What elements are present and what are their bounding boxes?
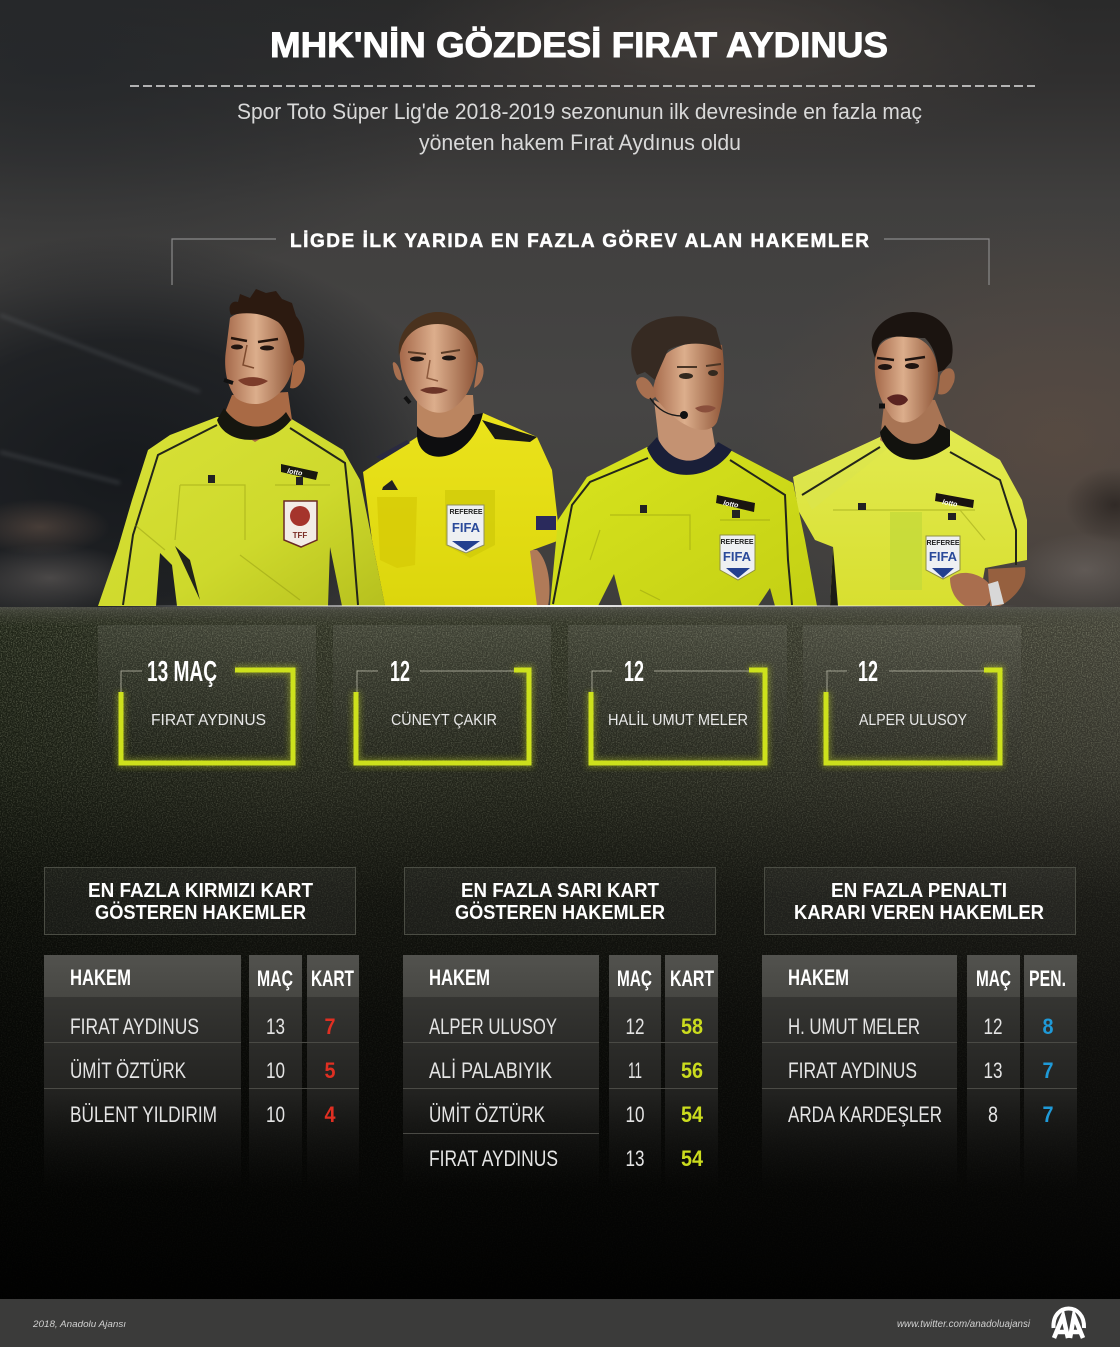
table: yellow cards: FIRAT AYDINUS (429, 1146, 558, 1171)
table: penalties: 8 (1042, 1014, 1054, 1039)
table: yellow cards: 54 (681, 1102, 704, 1127)
illustration: referee Fırat Aydınus: TFF (293, 531, 307, 540)
stat card: Cüneyt Çakır: 12 (390, 656, 410, 688)
stat card: Alper Ulusoy (803, 625, 1021, 785)
table: penalties (762, 955, 1077, 1190)
baseline light under referees (98, 605, 1018, 607)
table: red cards: FIRAT AYDINUS (70, 1014, 199, 1039)
illustration: referee Cüneyt Çakır: FIFA (452, 520, 481, 535)
table: yellow cards: KART (670, 966, 714, 991)
heading: penalties (764, 868, 1076, 934)
table: red cards: 7 (324, 1014, 336, 1039)
stat card: Alper Ulusoy: ALPER ULUSOY (859, 712, 967, 729)
table: penalties: 13 (984, 1058, 1002, 1083)
table: yellow cards: HAKEM (429, 965, 490, 990)
table: yellow cards: 56 (681, 1058, 703, 1083)
stat card: Cüneyt Çakır (333, 625, 551, 785)
icon: Anadolu Agency logo (1053, 1308, 1084, 1338)
table: red cards: HAKEM (70, 965, 131, 990)
table: yellow cards: MAÇ (617, 966, 652, 991)
table: penalties: PEN. (1029, 966, 1066, 991)
heading: red cards: GÖSTEREN HAKEMLER (95, 901, 307, 924)
subtitle: yöneten hakem Fırat Aydınus oldu (419, 130, 741, 155)
table: penalties: 7 (1042, 1102, 1054, 1127)
illustration: referee Halil Umut Meler (550, 316, 817, 606)
credit: 2018, Anadolu Ajansı (32, 1319, 126, 1330)
table: yellow cards: 58 (681, 1014, 703, 1039)
heading: penalties: KARARI VEREN HAKEMLER (794, 902, 1045, 924)
footer (0, 1299, 1120, 1347)
table: penalties: 8 (988, 1102, 998, 1127)
table: yellow cards: ÜMİT ÖZTÜRK (429, 1102, 545, 1127)
table: yellow cards: ALPER ULUSOY (429, 1014, 557, 1039)
heading: red cards: EN FAZLA KIRMIZI KART (88, 880, 313, 902)
stat card: Fırat Aydınus: 13 MAÇ (147, 656, 217, 688)
panel: penalties (762, 868, 1077, 1190)
table: yellow cards: 12 (626, 1014, 644, 1039)
illustration: referee Fırat Aydınus (98, 289, 385, 606)
heading: red cards (44, 868, 356, 934)
stat card: Fırat Aydınus: FIRAT AYDINUS (151, 712, 266, 729)
illustration: referee Halil Umut Meler: FIFA (723, 549, 752, 564)
table: red cards: BÜLENT YILDIRIM (70, 1102, 217, 1127)
illustration: referee Cüneyt Çakır (363, 312, 560, 606)
table: red cards: 10 (266, 1102, 285, 1127)
stat card: Halil Umut Meler: HALİL UMUT MELER (608, 710, 748, 729)
table: penalties: H. UMUT MELER (788, 1014, 920, 1039)
table: red cards: 5 (324, 1058, 336, 1083)
heading: yellow cards: EN FAZLA SARI KART (461, 880, 659, 902)
table: yellow cards: 10 (626, 1102, 644, 1127)
stat card: Halil Umut Meler: 12 (624, 656, 644, 688)
table: penalties: 12 (984, 1014, 1002, 1039)
stat card: Cüneyt Çakır: CÜNEYT ÇAKIR (391, 711, 497, 729)
table: red cards: 13 (266, 1014, 285, 1039)
illustration: referee Halil Umut Meler: REFEREE (720, 539, 754, 546)
illustration: referee Halil Umut Meler: lotto (723, 500, 740, 510)
illustration: referee Alper Ulusoy: lotto (942, 499, 959, 509)
subtitle (237, 99, 922, 155)
table: yellow cards: ALİ PALABIYIK (429, 1058, 552, 1083)
table: red cards: KART (311, 966, 354, 991)
subtitle: Spor Toto Süper Lig'de 2018-2019 sezonunun ilk devresinde en fazla maç (237, 99, 922, 124)
heading: yellow cards: GÖSTEREN HAKEMLER (455, 901, 666, 924)
table: red cards: MAÇ (257, 966, 293, 991)
heading: penalties: EN FAZLA PENALTI (831, 880, 1007, 902)
section heading: LİGDE İLK YARIDA EN FAZLA GÖREV ALAN HAKEMLER (290, 231, 869, 252)
illustration: referee Alper Ulusoy: REFEREE (926, 540, 960, 547)
illustration: referee Fırat Aydınus: lotto (287, 468, 304, 478)
panel: yellow cards (403, 868, 718, 1190)
table: penalties: 7 (1042, 1058, 1054, 1083)
illustration: referee Alper Ulusoy (793, 312, 1027, 606)
table: penalties: ARDA KARDEŞLER (788, 1102, 942, 1127)
stat card: Alper Ulusoy: 12 (858, 656, 878, 688)
twitter link text: www.twitter.com/anadoluajansi (897, 1319, 1031, 1330)
table: red cards: ÜMİT ÖZTÜRK (70, 1058, 186, 1083)
stat card: Fırat Aydınus (98, 625, 316, 785)
table: yellow cards (403, 955, 718, 1190)
table: yellow cards: 13 (626, 1146, 644, 1171)
heading: yellow cards (404, 868, 716, 934)
stat card: Halil Umut Meler (568, 625, 787, 785)
table: penalties: MAÇ (976, 966, 1011, 991)
table: penalties: FIRAT AYDINUS (788, 1058, 917, 1083)
table: yellow cards: 54 (681, 1146, 704, 1171)
illustration: referee Alper Ulusoy: FIFA (929, 549, 958, 564)
table: red cards (44, 955, 359, 1190)
table: red cards: 4 (324, 1102, 336, 1127)
table: red cards: 10 (266, 1058, 285, 1083)
illustration: referee Cüneyt Çakır: REFEREE (449, 509, 483, 516)
table: yellow cards: 11 (628, 1058, 642, 1083)
panel: red cards (44, 868, 359, 1190)
title: MHK'NİN GÖZDESİ FIRAT AYDINUS (270, 26, 888, 65)
section heading (172, 231, 989, 285)
table: penalties: HAKEM (788, 965, 849, 990)
